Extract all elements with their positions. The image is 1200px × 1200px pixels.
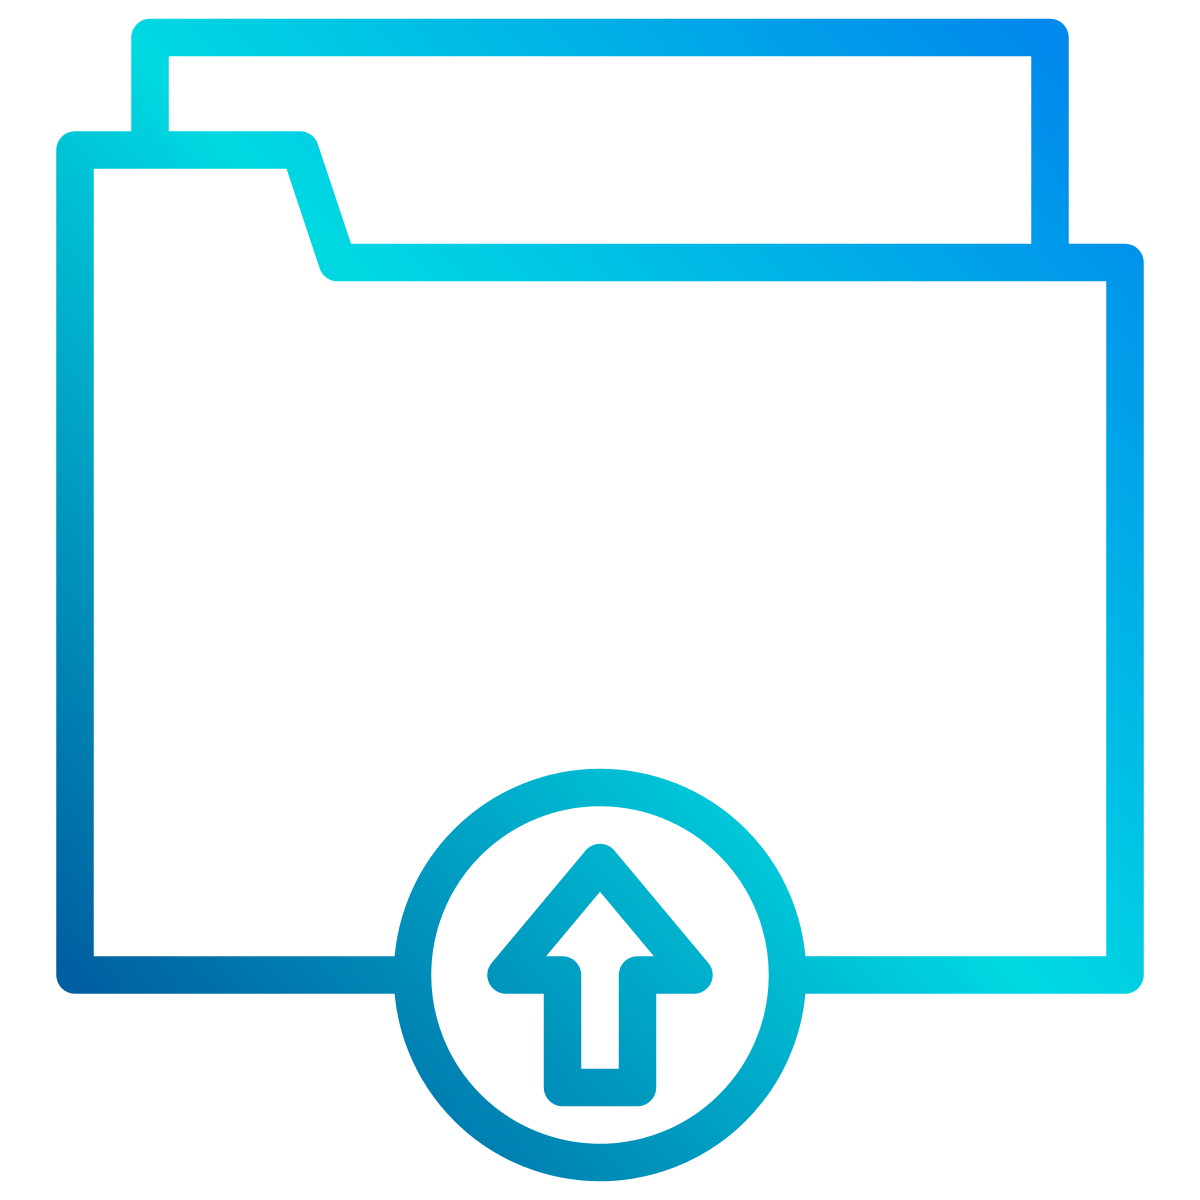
upload circle [412,788,788,1162]
folder outline [75,150,1125,975]
upload arrow [506,862,694,1088]
back sheet [150,38,1050,262]
